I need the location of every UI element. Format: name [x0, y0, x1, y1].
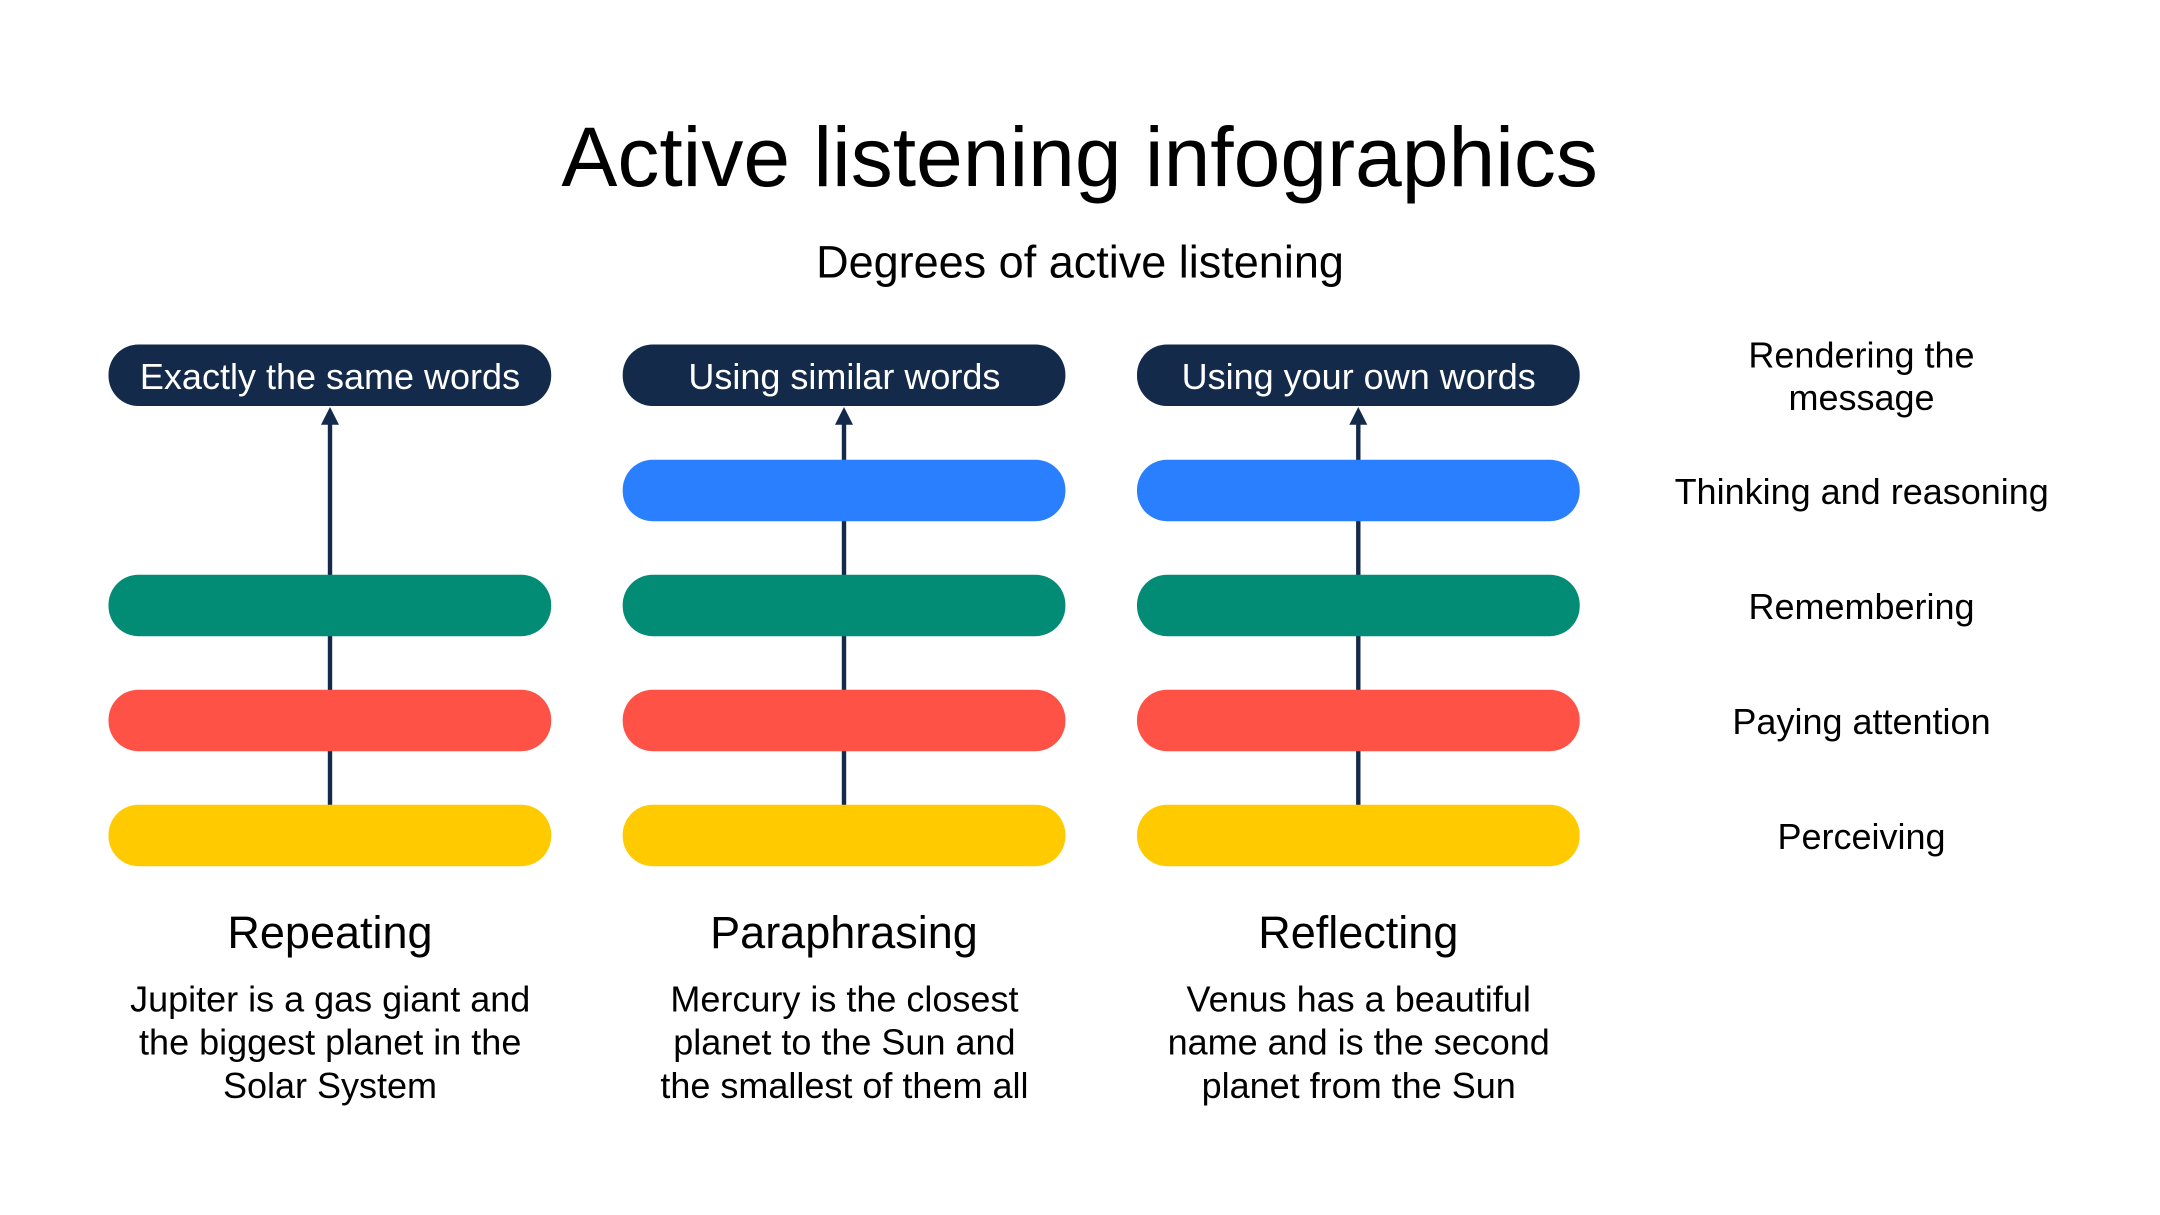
label: thinking and reasoning: Thinking and reasoning — [1675, 471, 2049, 512]
heading: repeating: Repeating — [227, 907, 433, 958]
text: paraphrasing description: planet to the Sun and — [673, 1022, 1016, 1063]
panel: level labels — [1675, 334, 2049, 857]
text: repeating description: Solar System — [223, 1065, 437, 1106]
label: paying attention: Paying attention — [1732, 701, 1991, 742]
text: reflecting description — [1168, 979, 1550, 1106]
bar: thinking and reasoning — [623, 460, 1065, 521]
text: paraphrasing description: the smallest of them all — [660, 1065, 1028, 1106]
text: repeating description: the biggest planet in the — [139, 1022, 521, 1063]
pill: using your own words — [1137, 344, 1580, 406]
arrow: paraphrasing — [835, 407, 853, 805]
bar: remembering — [108, 575, 551, 636]
text: repeating description: Jupiter is a gas giant and — [130, 979, 530, 1020]
bar: thinking and reasoning — [1137, 460, 1580, 521]
bar: remembering — [623, 575, 1065, 636]
text: reflecting description: planet from the Sun — [1202, 1065, 1516, 1106]
label: rendering the message — [1748, 334, 1975, 418]
bar: paying attention — [1137, 690, 1580, 751]
text: repeating description — [130, 979, 530, 1106]
bar: perceiving — [1137, 805, 1580, 866]
text: paraphrasing description — [660, 979, 1028, 1106]
text: reflecting description: name and is the second — [1168, 1022, 1550, 1063]
pill: exactly the same words: Exactly the same words — [140, 356, 520, 397]
pill: using your own words: Using your own words — [1182, 356, 1536, 397]
panel: paraphrasing column — [623, 344, 1065, 1106]
heading: reflecting: Reflecting — [1258, 907, 1458, 958]
title: Active listening infographics — [561, 110, 1598, 204]
pill: exactly the same words — [108, 344, 551, 406]
label: rendering the message: Rendering the — [1748, 334, 1975, 376]
pill: using similar words: Using similar words — [688, 356, 1000, 397]
arrow: repeating — [321, 407, 339, 805]
panel: reflecting column — [1137, 344, 1580, 1106]
text: reflecting description: Venus has a beautiful — [1187, 979, 1531, 1020]
subtitle: Degrees of active listening — [816, 236, 1344, 287]
panel: repeating column — [108, 344, 551, 1106]
arrow: reflecting — [1349, 407, 1367, 805]
bar: remembering — [1137, 575, 1580, 636]
label: rendering the message: message — [1788, 377, 1935, 418]
label: remembering: Remembering — [1748, 586, 1975, 627]
bar: perceiving — [108, 805, 551, 866]
label: perceiving: Perceiving — [1777, 816, 1946, 857]
pill: using similar words — [623, 344, 1065, 406]
heading: paraphrasing: Paraphrasing — [710, 907, 978, 958]
text: paraphrasing description: Mercury is the closest — [670, 979, 1018, 1020]
bar: perceiving — [623, 805, 1065, 866]
bar: paying attention — [108, 690, 551, 751]
bar: paying attention — [623, 690, 1065, 751]
